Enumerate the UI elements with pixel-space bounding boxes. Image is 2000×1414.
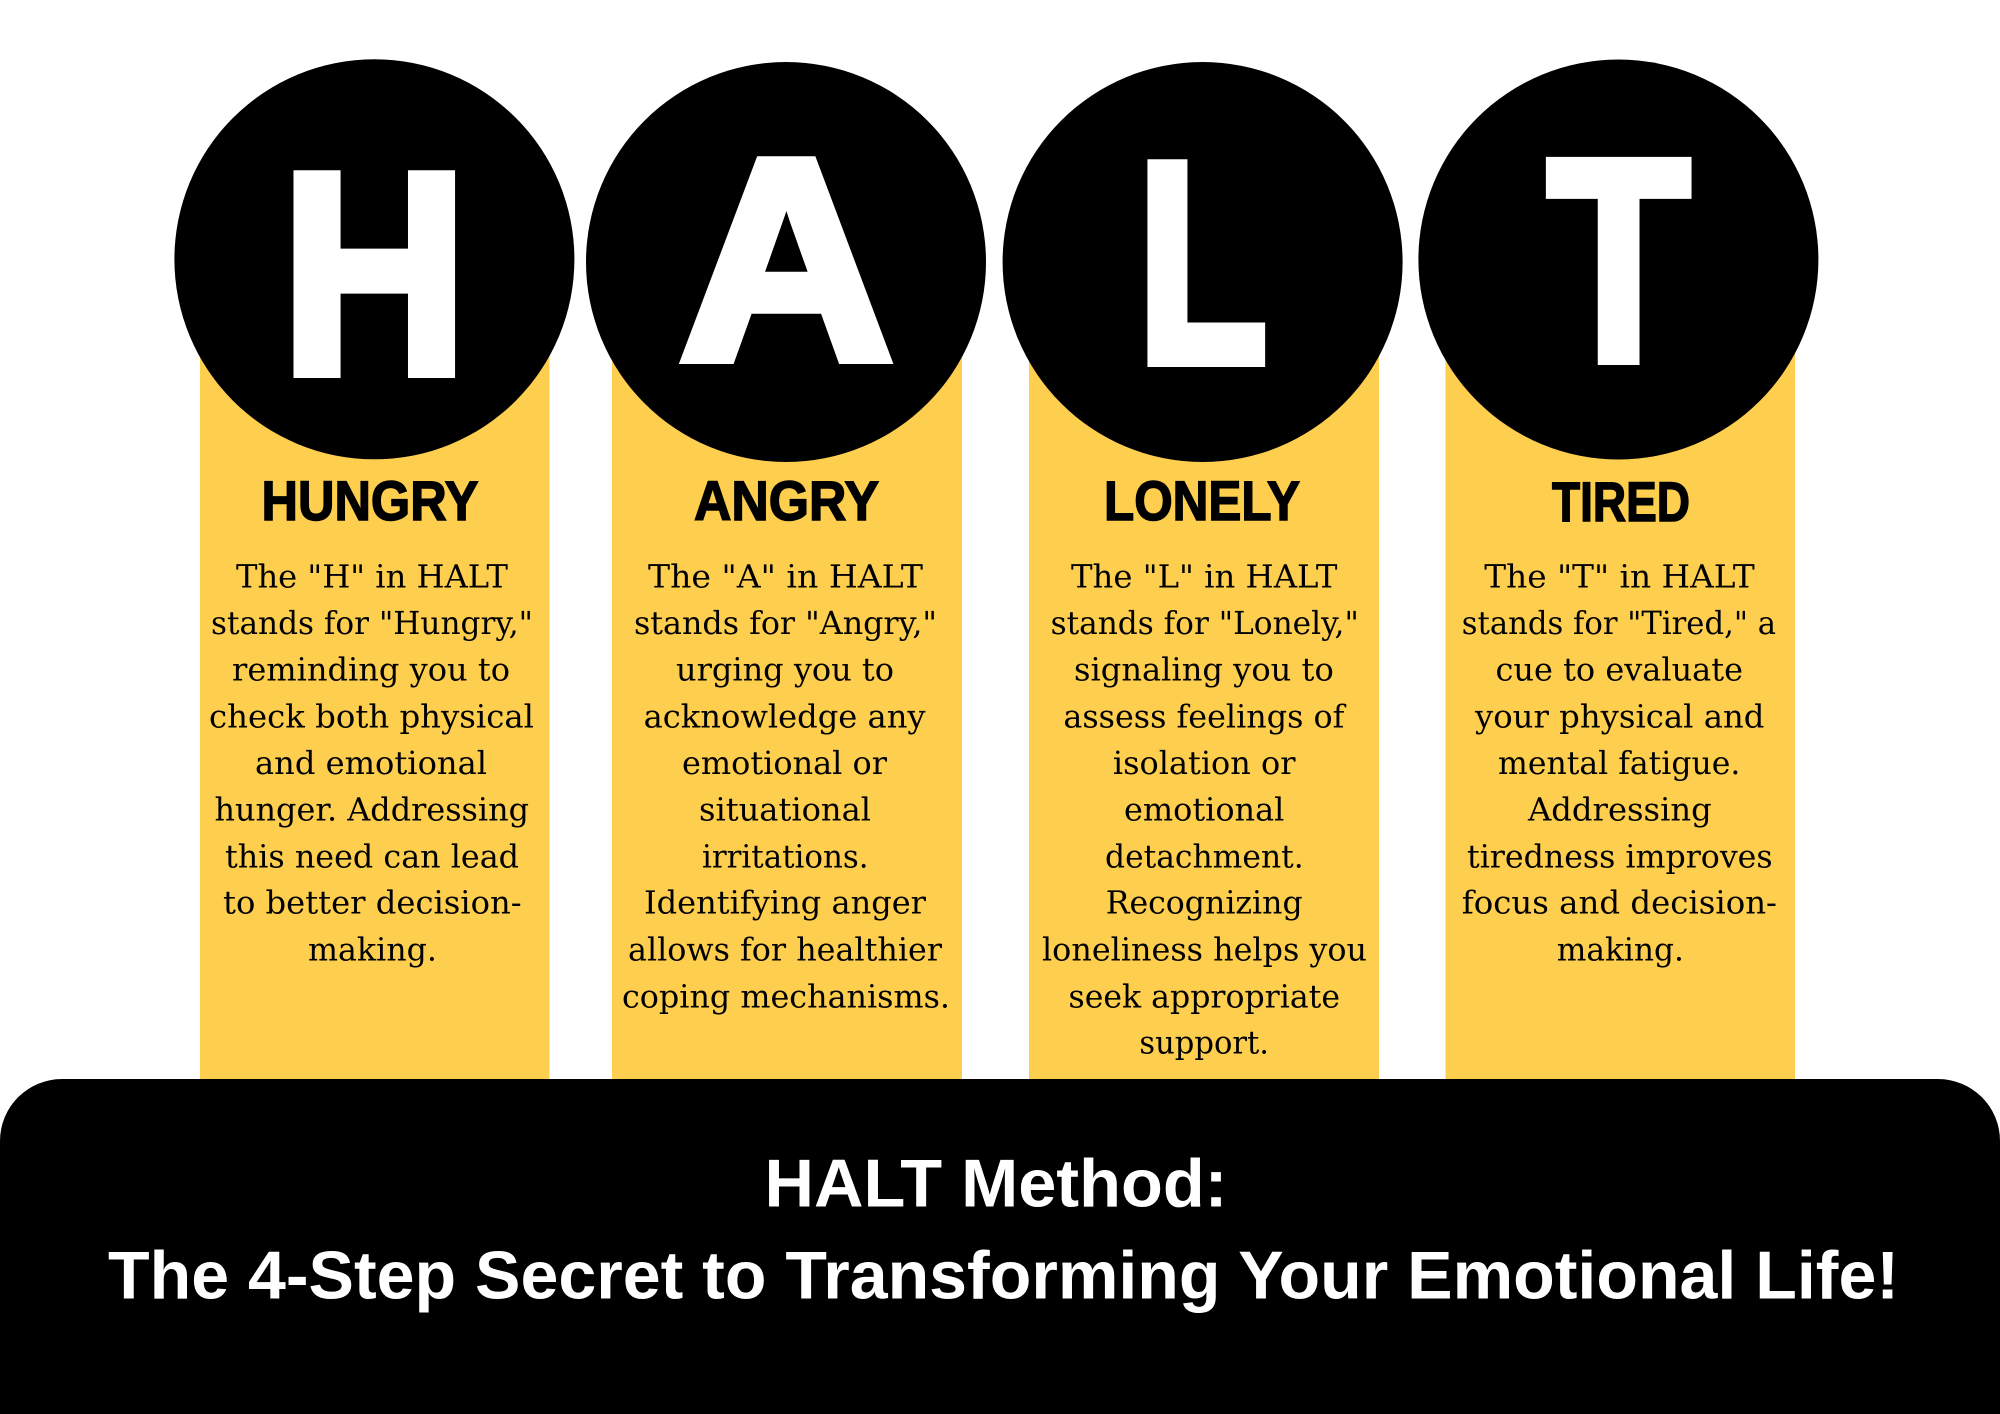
panel: hungry (174, 59, 574, 1090)
text block: lonely: signaling you to (1074, 651, 1334, 689)
text block: angry: emotional or (682, 744, 888, 782)
text block: hungry (209, 558, 534, 968)
heading: hungry: HUNGRY (262, 469, 478, 532)
letter: L: L (1138, 104, 1267, 420)
text block: lonely: seek appropriate (1068, 977, 1340, 1015)
text block: angry (622, 558, 950, 1015)
text block: tired: focus and decision- (1462, 884, 1777, 922)
heading: tired: TIRED (1552, 470, 1690, 533)
letter: T: T (1547, 100, 1690, 422)
title (108, 1146, 1899, 1314)
circle: A (586, 62, 986, 462)
text block: lonely: stands for "Lonely," (1051, 604, 1359, 642)
text block: angry: acknowledge any (644, 697, 926, 735)
banner background (0, 1079, 2000, 1414)
text block: lonely (1042, 558, 1367, 1062)
text block: angry: allows for healthier (628, 930, 943, 968)
text block: hungry: stands for "Hungry," (211, 604, 533, 642)
text block: angry: irritations. (702, 837, 869, 875)
text block: tired: The "T" in HALT (1484, 558, 1755, 596)
circle: L (1003, 62, 1403, 462)
text block: tired: tiredness improves (1467, 837, 1773, 875)
text block: lonely: assess feelings of (1063, 697, 1347, 735)
title: The 4-Step Secret to Transforming Your Emotional Life! (108, 1238, 1899, 1314)
heading: angry: ANGRY (694, 469, 879, 532)
heading: lonely: LONELY (1104, 469, 1300, 532)
text block: angry: situational (699, 790, 871, 828)
text block: hungry: making. (308, 930, 437, 968)
panel: title banner (0, 1079, 2000, 1414)
text block: hungry: The "H" in HALT (236, 558, 509, 596)
text block: tired (1462, 558, 1777, 968)
text block: angry: stands for "Angry," (634, 604, 937, 642)
panel: lonely (1003, 62, 1403, 1090)
text block: hungry: to better decision- (223, 884, 522, 922)
text block: hungry: hunger. Addressing (214, 790, 529, 828)
text block: tired: making. (1557, 930, 1684, 968)
text block: lonely: emotional (1124, 790, 1284, 828)
text block: tired: your physical and (1474, 697, 1764, 735)
column: angry (612, 300, 962, 1090)
text block: lonely: detachment. (1105, 837, 1304, 875)
text block: angry: urging you to (676, 651, 894, 689)
text block: angry: The "A" in HALT (648, 558, 924, 596)
text block: hungry: check both physical (209, 697, 534, 735)
text block: hungry: this need can lead (225, 837, 519, 875)
text block: lonely: support. (1139, 1024, 1269, 1062)
panel: angry (586, 62, 986, 1090)
column: tired (1446, 300, 1795, 1090)
text block: lonely: The "L" in HALT (1071, 558, 1338, 596)
circle: T (1418, 60, 1818, 460)
letter: A: A (680, 100, 893, 420)
title: HALT Method: (764, 1146, 1228, 1222)
text block: hungry: and emotional (255, 744, 487, 782)
text block: lonely: isolation or (1113, 744, 1296, 782)
text block: tired: cue to evaluate (1496, 651, 1743, 689)
column: hungry (200, 300, 550, 1090)
text block: angry: Identifying anger (644, 884, 927, 922)
text block: tired: stands for "Tired," a (1462, 604, 1776, 642)
panel: tired (1418, 60, 1818, 1090)
text block: tired: mental fatigue. (1498, 744, 1740, 782)
letter: H: H (281, 114, 468, 434)
text block: lonely: loneliness helps you (1042, 930, 1367, 968)
text block: tired: Addressing (1527, 790, 1712, 828)
text block: hungry: reminding you to (232, 651, 510, 689)
column: lonely (1029, 300, 1379, 1090)
text block: lonely: Recognizing (1106, 884, 1303, 922)
circle: H (174, 59, 574, 459)
text block: angry: coping mechanisms. (622, 977, 950, 1015)
